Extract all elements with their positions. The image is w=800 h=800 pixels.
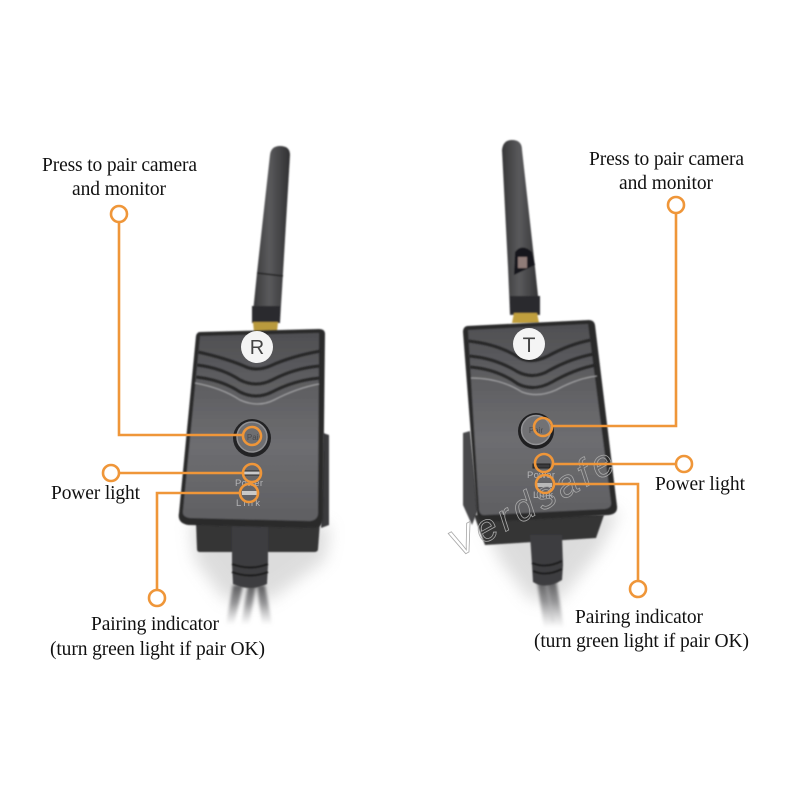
badge: T <box>513 328 545 360</box>
badge: R <box>241 331 273 363</box>
lower block and strain relief: transmitter <box>474 515 604 586</box>
LED labels: receiver: Link <box>236 498 260 509</box>
soft shadow: receiver <box>190 520 330 600</box>
LED labels: transmitter: Link <box>533 490 553 501</box>
body: transmitter <box>463 320 617 522</box>
label: receiver pairing indicator: Pairing indicator <box>91 614 220 635</box>
label: transmitter power light: Power light <box>655 474 746 495</box>
callout: transmitter pairing indicator <box>536 475 646 597</box>
side clip: transmitter <box>463 431 478 525</box>
label: receiver press to pair: Press to pair camera <box>42 155 197 176</box>
label: transmitter pairing indicator: (turn green light if pair OK) <box>534 631 749 652</box>
label: transmitter pairing indicator: Pairing indicator <box>575 607 704 628</box>
button: transmitter: Pair <box>529 426 543 435</box>
button: receiver: Pair <box>247 433 261 442</box>
watermark: Verdsafe: Verdsafe <box>442 441 622 566</box>
device: transmitter T <box>463 140 620 628</box>
badge: T: T <box>523 334 536 357</box>
LED labels: transmitter: Power <box>527 470 555 481</box>
antenna: receiver <box>252 146 290 332</box>
label: receiver press to pair: and monitor <box>72 179 166 200</box>
wave grooves: transmitter <box>468 340 597 395</box>
label: receiver power light: Power light <box>51 483 141 504</box>
button: transmitter <box>518 413 554 449</box>
cables: transmitter <box>537 580 564 628</box>
antenna: transmitter <box>502 140 540 323</box>
callout: transmitter power light <box>535 454 692 472</box>
body: receiver <box>179 329 325 528</box>
callout: receiver press to pair <box>111 206 261 445</box>
side clip: receiver <box>321 433 329 528</box>
label: transmitter press to pair: and monitor <box>619 173 714 194</box>
device: receiver R <box>179 146 330 625</box>
LED labels: receiver <box>235 471 263 509</box>
lower block and strain relief: receiver <box>196 522 320 588</box>
callout: transmitter press to pair <box>534 197 684 436</box>
callout: receiver pairing indicator <box>149 484 258 606</box>
badge: R: R <box>250 337 264 359</box>
wave grooves: receiver <box>195 351 321 404</box>
label: receiver pairing indicator: (turn green light if pair OK) <box>50 639 265 660</box>
LED labels: receiver: Power <box>235 478 263 489</box>
LED labels: transmitter <box>527 464 555 501</box>
label: transmitter press to pair: Press to pair camera <box>589 149 744 170</box>
cables: receiver <box>226 585 272 625</box>
button: receiver <box>233 419 271 457</box>
soft shadow: transmitter <box>480 510 620 600</box>
callout: receiver power light <box>103 464 261 482</box>
